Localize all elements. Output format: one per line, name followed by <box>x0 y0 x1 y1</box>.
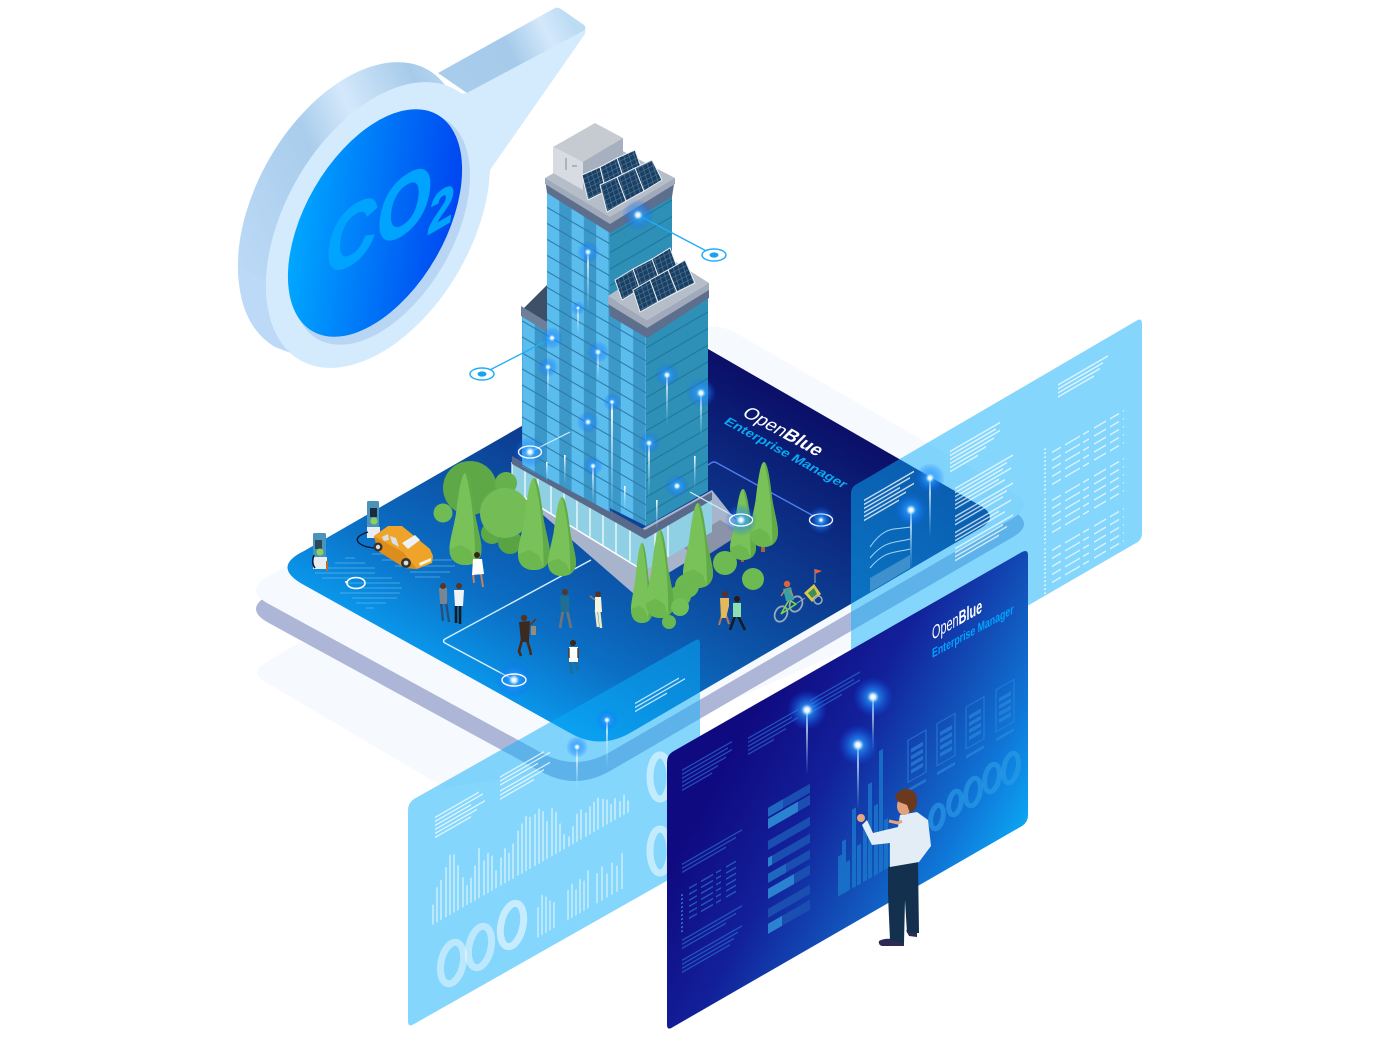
circuit line to right node <box>677 462 821 520</box>
panel background <box>667 551 1028 1029</box>
right translucent panel <box>851 320 1142 708</box>
panel content skewed <box>682 579 1014 986</box>
man hand <box>857 814 865 822</box>
text block middle <box>950 423 1000 472</box>
magnifying lens <box>191 8 586 407</box>
main tower left face <box>547 190 610 512</box>
data table <box>681 894 683 934</box>
lens label CO2: CO <box>321 141 438 300</box>
platform top <box>256 326 1024 762</box>
circuit line to lower node <box>444 560 591 680</box>
person: woman in light outfit <box>590 591 602 628</box>
podium and building <box>512 123 742 594</box>
wing roof band <box>608 283 709 338</box>
person: man in teal top <box>560 589 571 628</box>
podium glass <box>512 462 644 571</box>
trees and shrubs left <box>434 461 576 576</box>
dashboard text: OpenBlue: OpenBlue <box>932 595 982 645</box>
person: man in white tee <box>569 640 578 674</box>
panel background <box>851 320 1142 708</box>
dark dashboard panel <box>667 551 1028 1029</box>
panel lights <box>910 510 912 570</box>
panel contents <box>864 347 1124 701</box>
wave chart <box>870 527 910 592</box>
floor text: OpenBlue: OpenBlue <box>738 403 829 459</box>
text blocks <box>682 668 860 972</box>
roof sensor and link to node <box>622 199 726 261</box>
lower solar panels <box>615 248 695 312</box>
platform lower strip <box>560 620 851 776</box>
person: man in white shirt <box>454 583 464 624</box>
low wing roof <box>522 285 547 323</box>
dashboard text: Enterprise Manager: Enterprise Manager <box>932 602 1014 662</box>
yellow car <box>374 526 433 569</box>
left translucent panel <box>408 640 700 1025</box>
small bar charts <box>538 849 622 937</box>
main bar chart <box>433 752 628 925</box>
podium step <box>680 520 742 560</box>
floor brand text <box>721 403 851 491</box>
person: man walking brown <box>519 615 536 656</box>
wing sensor and link to node <box>470 327 563 380</box>
panel background <box>408 640 700 1025</box>
man head <box>897 797 911 815</box>
glowing node far right <box>807 506 835 534</box>
glowing node lower <box>496 662 532 698</box>
lens handle front <box>420 30 586 200</box>
front wing left face <box>610 305 646 526</box>
wing roof top <box>608 257 709 320</box>
ev charger left <box>313 533 328 571</box>
building sensor lights <box>538 241 716 530</box>
panel lights <box>606 720 608 770</box>
glowing node left of tower <box>514 432 570 468</box>
platform base <box>256 326 1024 781</box>
floor text: Enterprise Manager: Enterprise Manager <box>721 415 851 491</box>
platform shadow <box>257 642 560 788</box>
man trousers <box>888 862 919 943</box>
dashboard lights <box>806 710 808 775</box>
platform side <box>256 346 1024 781</box>
batteries <box>908 679 1014 782</box>
lens handle side <box>438 8 586 93</box>
trees and shrubs right of entrance <box>631 462 778 629</box>
plug icon on ground <box>345 578 365 588</box>
podium right glass <box>644 498 712 571</box>
rooftop plant box <box>553 123 623 162</box>
front wing right face <box>646 294 708 526</box>
ground hatching for EV parking <box>315 554 455 608</box>
left text block over platform <box>864 471 914 520</box>
man at dashboard <box>857 789 931 946</box>
lens blue disc <box>252 80 498 366</box>
man shoes <box>879 939 904 946</box>
bar chart <box>840 744 891 896</box>
main tower right face <box>610 195 672 305</box>
person: man in green shirt <box>730 596 745 630</box>
lens front ring <box>219 43 537 407</box>
person: woman in yellow <box>719 591 729 625</box>
text blocks <box>435 671 685 837</box>
lens inner shadow <box>255 83 507 375</box>
main roof band <box>545 178 675 233</box>
platform blue floor <box>288 340 990 742</box>
person: woman on phone <box>439 583 449 622</box>
ring gauges <box>437 755 670 986</box>
panel contents <box>433 671 685 998</box>
glowing node by trees <box>690 492 757 536</box>
text block top right <box>1058 356 1108 397</box>
cyclist with trailer <box>772 569 822 624</box>
battery labels <box>908 729 1014 790</box>
upper solar panels <box>582 150 662 212</box>
low wing <box>522 316 547 480</box>
lens rim side <box>191 23 509 387</box>
main roof top <box>545 143 675 217</box>
progress bars <box>768 784 810 817</box>
ev charger right <box>357 501 380 548</box>
man shirt <box>862 812 931 867</box>
data table <box>1044 448 1046 596</box>
people group <box>439 552 745 674</box>
text blocks lower <box>955 455 1013 561</box>
person: woman in white dress <box>472 552 484 587</box>
podium base line <box>512 490 644 571</box>
podium roof band <box>512 456 712 539</box>
plaza base <box>512 488 742 594</box>
ring gauges <box>929 752 1021 830</box>
lens label CO2: 2 <box>425 171 458 248</box>
